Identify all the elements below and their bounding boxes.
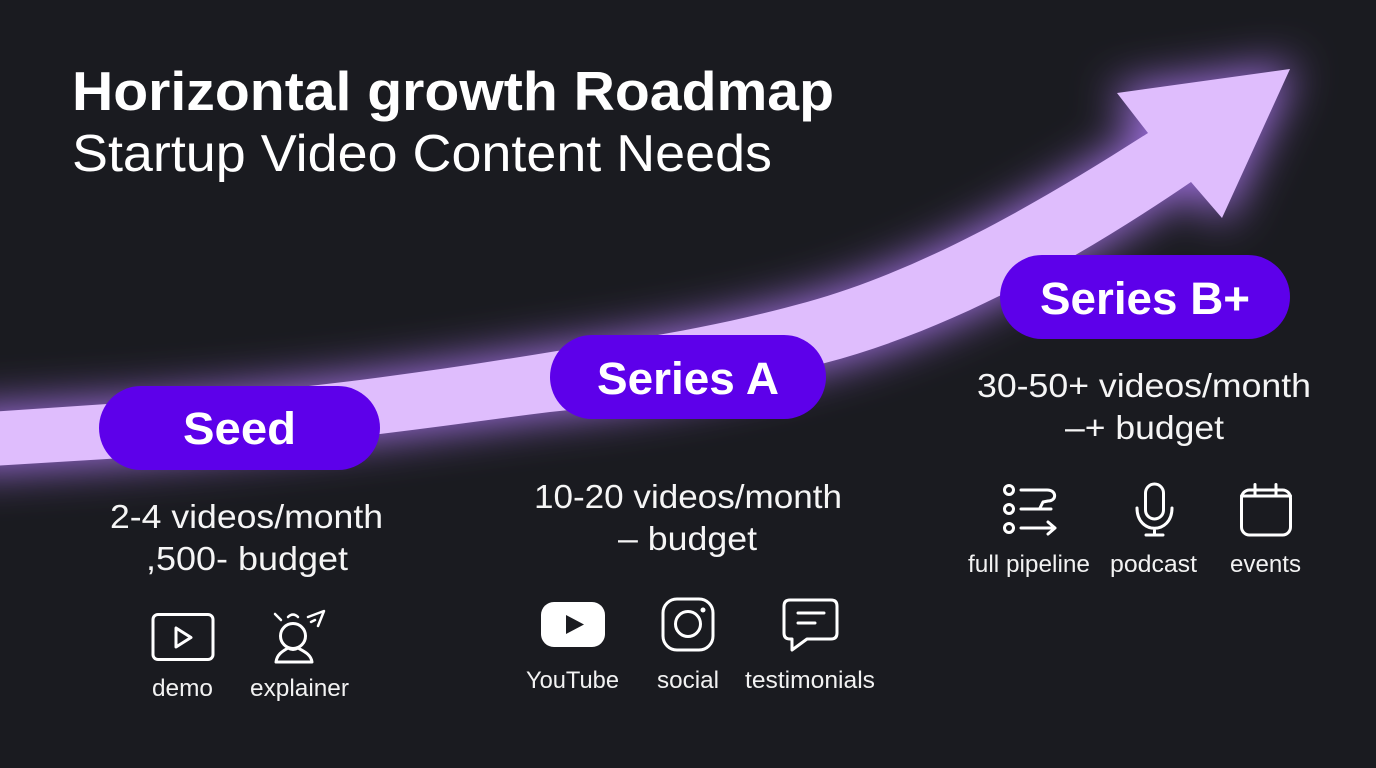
icon: full pipeline <box>1004 486 1055 534</box>
icon: podcast <box>1137 484 1172 535</box>
label: explainer: explainer <box>250 675 349 702</box>
text: Series A volume and budget <box>534 478 842 557</box>
label: YouTube: YouTube <box>526 667 619 694</box>
pill: Series B+ <box>1000 255 1290 339</box>
label: podcast: podcast <box>1110 551 1197 578</box>
text: Seed volume and budget: 2-4 videos/month <box>110 498 383 535</box>
text: Series B+ volume and budget <box>977 367 1311 446</box>
panel: Series B+ <box>968 255 1311 578</box>
subheading: Startup Video Content Needs <box>72 125 772 183</box>
text: Series B+ volume and budget: –+ budget <box>1065 409 1224 446</box>
label: testimonials: testimonials <box>745 667 875 694</box>
label: events: events <box>1230 551 1301 578</box>
text: Series A volume and budget: – budget <box>618 520 757 557</box>
icon: events <box>1242 484 1290 535</box>
icon: demo <box>153 614 213 660</box>
growth arrow <box>0 69 1290 468</box>
icon: social <box>663 599 713 650</box>
text: Series A volume and budget: 10-20 videos/month <box>534 478 842 515</box>
icon: testimonials <box>784 600 837 650</box>
icon: explainer <box>275 611 324 662</box>
pill: Series A: Series A <box>597 353 779 404</box>
panel: Series A <box>526 335 875 694</box>
title <box>72 60 834 183</box>
pill: Seed <box>99 386 380 470</box>
pill: Seed: Seed <box>183 403 296 454</box>
text: Seed volume and budget <box>110 498 383 577</box>
text: Series B+ volume and budget: 30-50+ videos/month <box>977 367 1311 404</box>
text: Seed volume and budget: ,500- budget <box>146 540 348 577</box>
label: demo: demo <box>152 675 213 702</box>
label: social: social <box>657 667 719 694</box>
pill: Series A <box>550 335 826 419</box>
panel: Seed <box>99 386 383 702</box>
label: full pipeline: full pipeline <box>968 551 1090 578</box>
pill: Series B+: Series B+ <box>1040 273 1250 324</box>
icon: YouTube <box>541 602 605 647</box>
heading: Horizontal growth Roadmap <box>72 60 834 122</box>
